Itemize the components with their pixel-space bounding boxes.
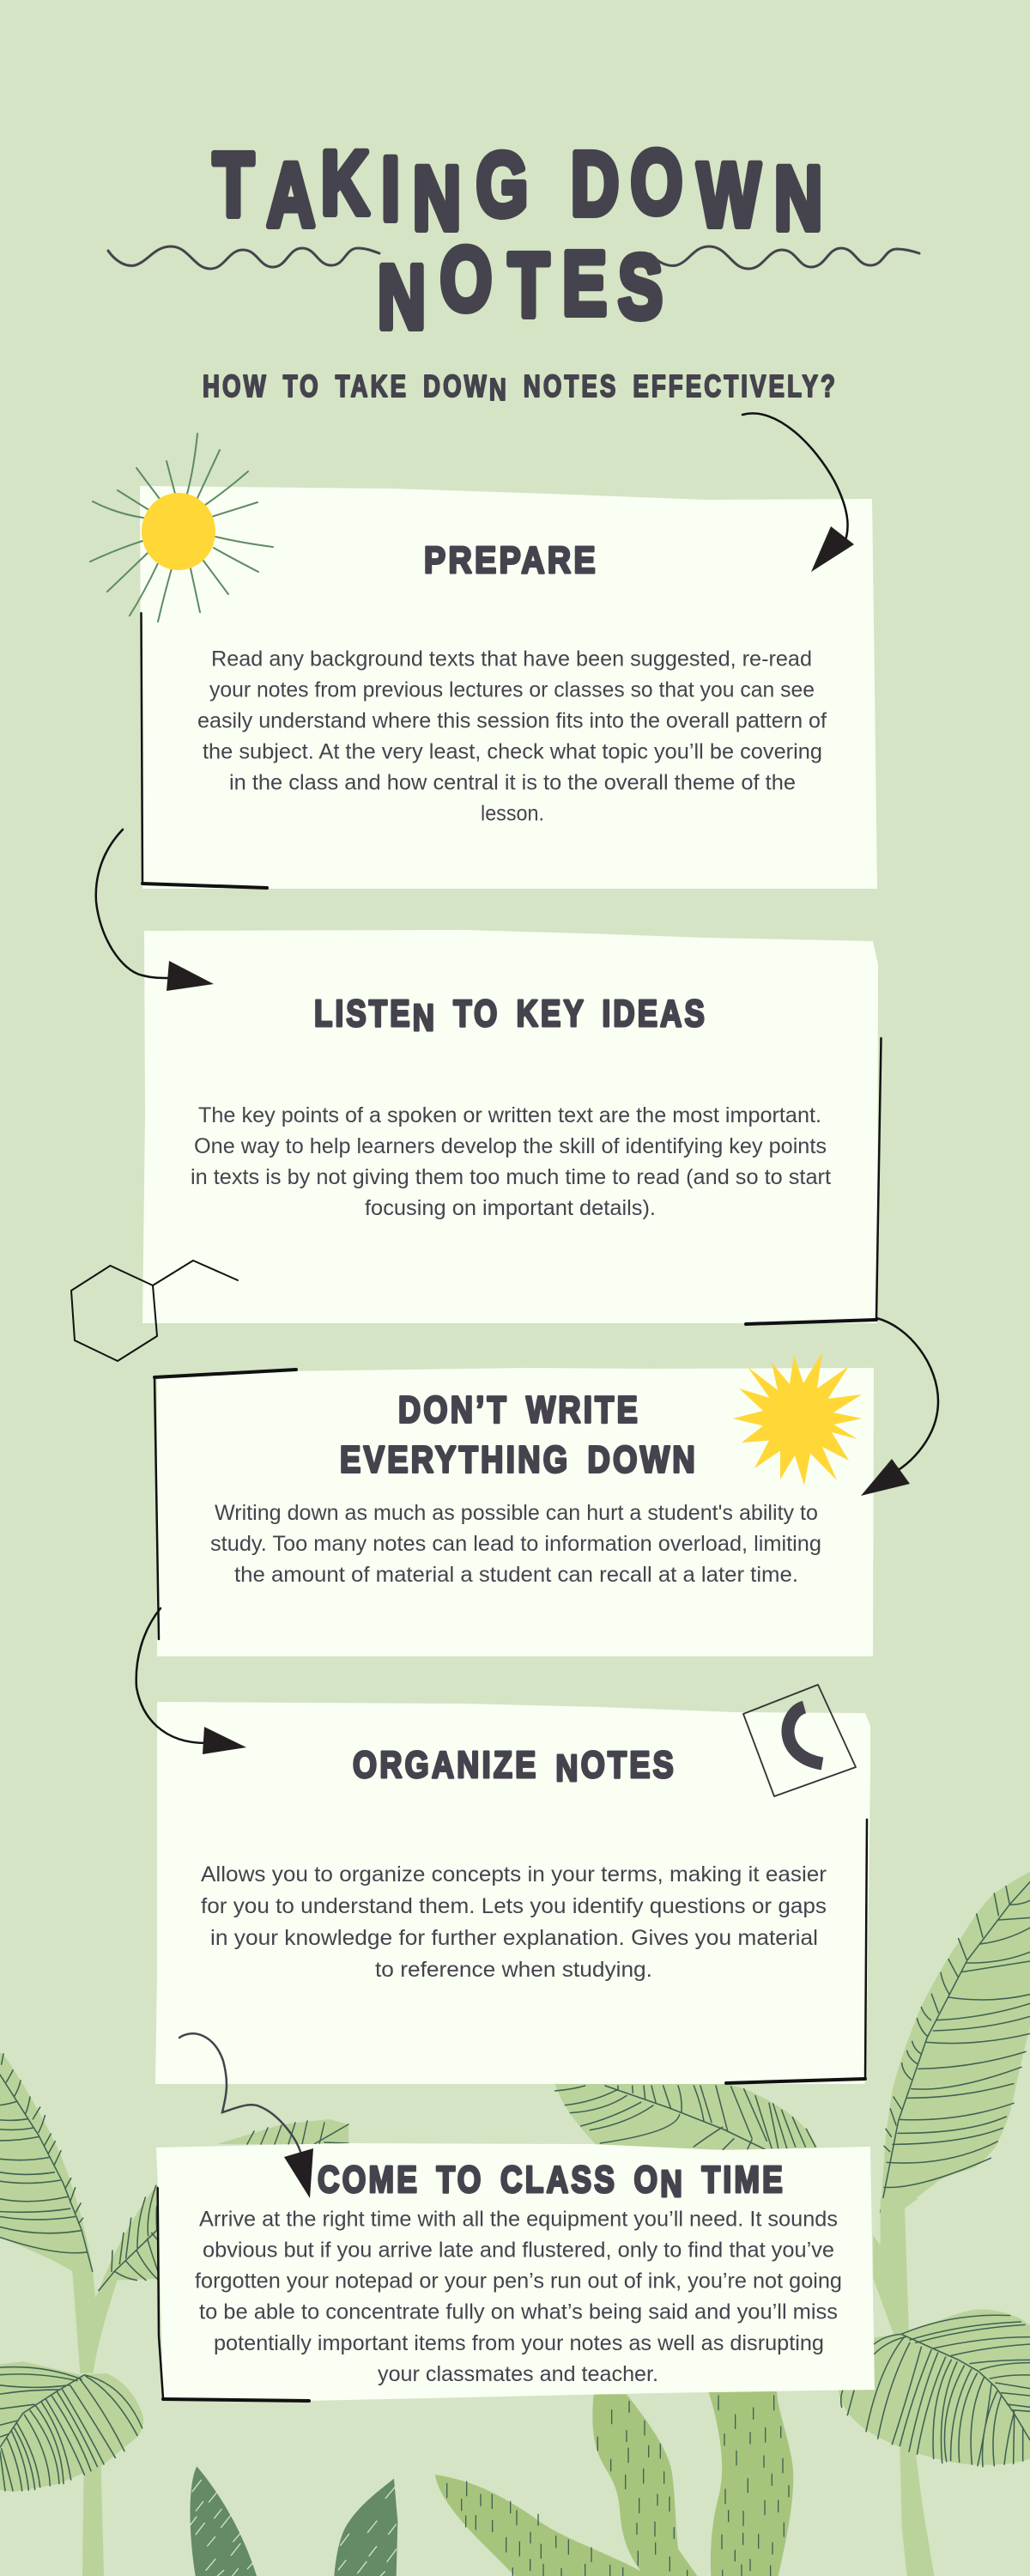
subtitle: HOW TO TAKE DOW <box>203 368 576 404</box>
body: organize notes: for you to understand them. Lets you identify questions or gaps <box>201 1894 827 1918</box>
plant: lower left stem <box>82 2447 104 2576</box>
heading: organize notes: N <box>555 1747 581 1789</box>
heading: come to class on time: COME TO CLASS O <box>318 2159 743 2201</box>
body: prepare: lesson. <box>481 802 544 826</box>
heading: don't write <box>340 1389 698 1480</box>
panel: don't write everything down <box>154 1368 874 1656</box>
leaf: lower right with stem <box>839 2198 1030 2576</box>
body: listen <box>191 1103 831 1220</box>
panel: organize notes <box>155 1702 870 2084</box>
body: don't write: Writing down as much as possible can hurt a student's ability to <box>215 1501 818 1525</box>
heading: don't write: DON’T WRITE <box>398 1389 640 1431</box>
body: organize notes: to reference when studying. <box>375 1958 652 1982</box>
body: don't write: the amount of material a student can recall at a later time. <box>234 1563 798 1587</box>
panel: listen to key ideas <box>142 930 881 1324</box>
heading: organize notes: ORGANIZE <box>353 1744 579 1786</box>
heading: prepare: PREPARE <box>424 539 598 581</box>
body: come to class on time: to be able to concentrate fully on what’s being said and you’ll miss <box>199 2300 838 2324</box>
body: come to class on time: forgotten your notepad or your pen’s run out of ink, you’re not going <box>195 2269 842 2293</box>
subtitle: N <box>489 372 509 407</box>
body: prepare: easily understand where this session fits into the overall pattern of <box>197 709 827 733</box>
leaves: upper left with small side leaf and stem <box>0 2052 159 2373</box>
body: come to class on time: potentially important items from your notes as well as disrupting <box>214 2331 824 2355</box>
heading: listen: LISTE <box>314 993 439 1035</box>
botanical illustration: foliage <box>0 1872 1030 2576</box>
corner line: prepare <box>141 613 267 888</box>
corner line: don't write <box>154 1370 296 1639</box>
arrow: prepare to listen <box>96 829 214 991</box>
icon: letter card <box>743 1685 856 1796</box>
title: TAKING DOWN <box>213 131 822 249</box>
body: don't write: study. Too many notes can lead to information overload, limiting <box>210 1532 821 1556</box>
subtitle: OTES EFFECTIVELY? <box>543 368 927 404</box>
title: NOTES <box>378 228 663 348</box>
icon: starburst <box>733 1352 862 1485</box>
panel: prepare <box>140 486 877 889</box>
heading: come to class on time: T <box>702 2159 723 2201</box>
body: don't write <box>210 1501 821 1587</box>
body: organize notes: Allows you to organize concepts in your terms, making it easier <box>201 1862 827 1886</box>
leaf: lower left <box>0 2361 143 2492</box>
icon: molecule <box>71 1261 238 1361</box>
heading: listen: N <box>413 997 437 1039</box>
corner line: organize notes <box>726 1820 867 2083</box>
body: come to class on time <box>195 2207 842 2386</box>
body: organize notes <box>201 1862 827 1982</box>
body: listen: The key points of a spoken or written text are the most important. <box>198 1103 821 1127</box>
heading: come to class on time: IME <box>723 2159 801 2201</box>
corner line: listen <box>746 1038 881 1324</box>
panel: come to class on time <box>156 2143 875 2401</box>
body: listen: One way to help learners develop the skill of identifying key points <box>194 1134 827 1158</box>
arrow: listen to don't write <box>861 1318 938 1496</box>
body: prepare: Read any background texts that have been suggested, re-read <box>211 647 812 671</box>
arrow: organize to come to class <box>179 2033 313 2198</box>
wavy underline right <box>651 246 919 269</box>
heading: listen: T <box>453 993 474 1035</box>
heading: organize notes: TES <box>608 1744 692 1786</box>
body: listen: in texts is by not giving them too much time to read (and so to start <box>191 1165 831 1189</box>
leaf: upper right <box>881 1872 1030 2233</box>
body: come to class on time: obvious but if you arrive late and flustered, only to find that you’ve <box>203 2239 834 2263</box>
leaf: centre behind card five <box>555 2084 818 2149</box>
body: prepare: your notes from previous lectures or classes so that you can see <box>209 678 815 702</box>
title <box>213 131 822 348</box>
leaf: behind card five, small <box>217 2119 348 2144</box>
body: prepare: in the class and how central it is to the overall theme of the <box>229 771 796 795</box>
body: come to class on time: Arrive at the right time with all the equipment you’ll need. It sounds <box>199 2207 838 2231</box>
icon: sun <box>90 434 273 622</box>
body: organize notes: in your knowledge for further explanation. Gives you material <box>210 1926 818 1950</box>
body: prepare <box>197 647 827 826</box>
arrow: subtitle to prepare <box>742 413 854 572</box>
subtitle: N <box>524 368 543 404</box>
body: come to class on time: your classmates and teacher. <box>378 2362 658 2386</box>
plants: bottom centre leaves <box>435 2391 793 2576</box>
heading: don't write: EVERYTHING DOWN <box>340 1439 698 1480</box>
heading: organize notes: O <box>581 1744 608 1786</box>
arrow: don't write to organize <box>136 1608 246 1754</box>
body: listen: focusing on important details). <box>365 1196 656 1220</box>
body: prepare: the subject. At the very least, check what topic you’ll be covering <box>203 740 822 764</box>
heading: listen: O KEY IDEAS <box>474 993 768 1035</box>
plants: dark green leaves <box>190 2466 397 2576</box>
heading: come to class on time: N <box>660 2163 685 2205</box>
corner line: come to class <box>158 2188 309 2401</box>
wavy underline left <box>108 246 379 269</box>
